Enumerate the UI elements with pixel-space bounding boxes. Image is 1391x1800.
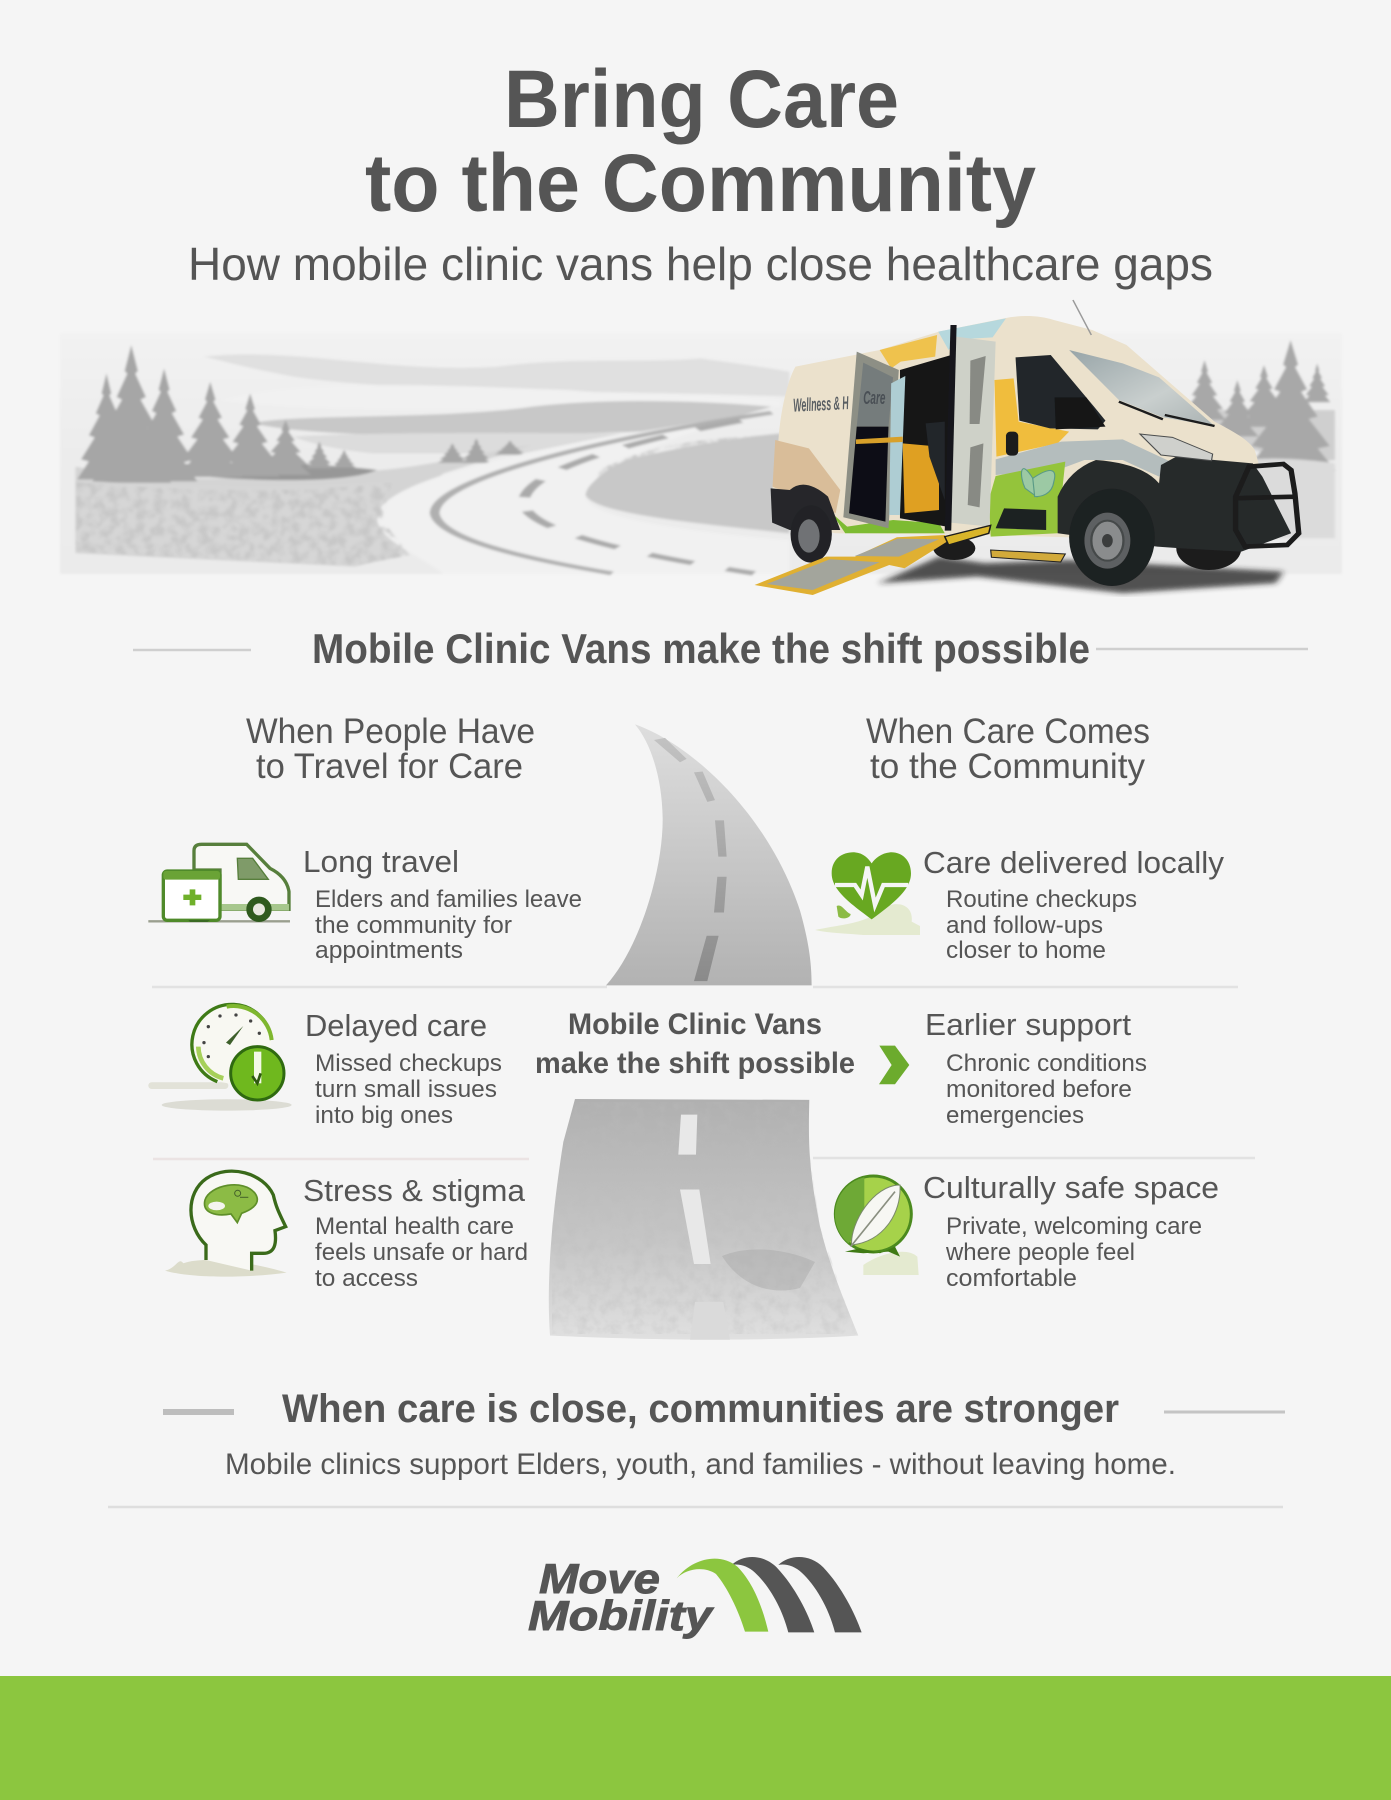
doorway	[900, 355, 951, 527]
title: to the Community	[365, 138, 1036, 229]
logo wordmark: Move	[539, 1555, 660, 1602]
label: care delivered locally: and follow-ups	[946, 912, 1103, 939]
body colour panels	[773, 318, 1171, 537]
logo: Move Mobility	[528, 1555, 862, 1639]
front wheel	[1069, 489, 1155, 586]
label: delayed care: into big ones	[315, 1102, 453, 1129]
left meadow texture	[76, 482, 410, 566]
subtitle: How mobile clinic vans help close healthcare gaps	[188, 238, 1213, 290]
far front wheel	[1176, 527, 1241, 570]
yellow interior	[903, 443, 939, 513]
bull bar	[1234, 464, 1299, 547]
label: culturally safe space: Private, welcoming care	[946, 1213, 1202, 1240]
side door handle	[1006, 432, 1018, 456]
front fender and bumper	[1058, 457, 1291, 552]
open front door	[945, 325, 996, 545]
footer divider	[108, 1506, 1283, 1508]
centre callout: make the shift possible	[535, 1047, 855, 1080]
headlight	[1140, 434, 1213, 461]
van photo illustration	[755, 300, 1299, 595]
van photo illustration: Care	[863, 388, 885, 409]
column heading: travel: to Travel for Care	[256, 747, 523, 786]
label: delayed care: Missed checkups	[315, 1050, 502, 1077]
label: delayed care: turn small issues	[315, 1076, 497, 1103]
column heading: community: to the Community	[870, 747, 1145, 786]
van ground shadow	[878, 557, 1283, 593]
column heading: community	[866, 712, 1150, 786]
logo wordmark: Mobility	[528, 1592, 715, 1639]
label: long travel: appointments	[315, 937, 463, 964]
section heading: Mobile Clinic Vans make the shift possible	[312, 625, 1090, 672]
label: long travel	[303, 844, 582, 964]
item: earlier support: monitored before	[946, 1076, 1132, 1103]
label: stress and stigma: Mental health care	[315, 1213, 514, 1240]
van body	[773, 316, 1259, 540]
closing heading: When care is close, communities are stronger	[282, 1387, 1119, 1431]
icon: medical van	[148, 844, 290, 922]
van lettering: Wellness & H	[793, 393, 849, 416]
item: culturally safe space	[835, 1170, 1219, 1292]
windshield	[1069, 350, 1215, 426]
antenna	[1073, 300, 1091, 335]
label: care delivered locally: closer to home	[946, 937, 1106, 964]
label: culturally safe space	[923, 1170, 1219, 1292]
column heading: travel: When People Have	[246, 712, 535, 751]
icon: head with speech bubble	[165, 1171, 287, 1277]
label: culturally safe space: where people feel	[945, 1239, 1135, 1266]
label: delayed care	[305, 1008, 502, 1129]
item: earlier support: Chronic conditions	[946, 1050, 1147, 1077]
road: upper curve	[606, 724, 812, 985]
cab side window	[1016, 355, 1105, 429]
centre callout	[535, 1008, 855, 1080]
label: stress and stigma: feels unsafe or hard	[315, 1239, 528, 1266]
label: stress and stigma: Stress & stigma	[303, 1173, 526, 1208]
lower door sill	[996, 508, 1046, 530]
item: earlier support: emergencies	[946, 1102, 1084, 1129]
closing text: Mobile clinics support Elders, youth, and families - without leaving home.	[225, 1448, 1176, 1481]
row dividers	[152, 987, 1255, 1159]
icon: feather in speech bubble	[835, 1176, 919, 1275]
road: lower straight	[549, 1099, 858, 1340]
footer band	[0, 1676, 1391, 1800]
column heading: community: When Care Comes	[866, 712, 1150, 751]
label: stress and stigma: to access	[315, 1265, 418, 1292]
item: stress and stigma	[165, 1171, 528, 1292]
item: earlier support	[925, 1007, 1147, 1129]
open rear door	[843, 352, 905, 528]
centre callout: Mobile Clinic Vans	[568, 1008, 822, 1041]
column heading: travel	[246, 712, 535, 786]
label: culturally safe space: Culturally safe space	[923, 1170, 1219, 1205]
side step	[991, 550, 1065, 562]
wheelchair ramp	[755, 535, 949, 595]
icon: heart with pulse	[815, 852, 920, 935]
label: care delivered locally	[923, 845, 1224, 964]
item: earlier support: Earlier support	[925, 1007, 1131, 1042]
label: care delivered locally: Routine checkups	[946, 886, 1137, 913]
wipers	[1119, 402, 1215, 426]
label: delayed care: Delayed care	[305, 1008, 487, 1043]
logo wordmark	[528, 1555, 715, 1639]
banner: grey landscape with road	[60, 333, 1342, 574]
van lettering	[793, 388, 885, 416]
side mirror	[1055, 397, 1105, 429]
underside wheel	[933, 537, 975, 560]
item: care delivered locally	[815, 845, 1224, 964]
label: long travel: Elders and families leave	[315, 886, 582, 913]
arrow: chevron	[879, 1046, 909, 1084]
logo arches	[677, 1557, 862, 1632]
label: long travel: the community for	[315, 912, 512, 939]
title	[365, 54, 1036, 229]
label: long travel: Long travel	[303, 844, 459, 879]
icon: clock	[148, 1003, 292, 1111]
item: long travel	[148, 844, 582, 964]
title: Bring Care	[504, 54, 899, 145]
label: stress and stigma	[303, 1173, 528, 1292]
butterfly decal	[1021, 469, 1055, 497]
right meadow texture	[590, 435, 790, 530]
rear wheel	[791, 505, 832, 563]
seat	[926, 422, 945, 500]
label: care delivered locally: Care delivered locally	[923, 845, 1224, 880]
label: culturally safe space: comfortable	[946, 1265, 1077, 1292]
item: delayed care	[148, 1003, 502, 1129]
rear bumper and wheel arch	[771, 485, 840, 530]
